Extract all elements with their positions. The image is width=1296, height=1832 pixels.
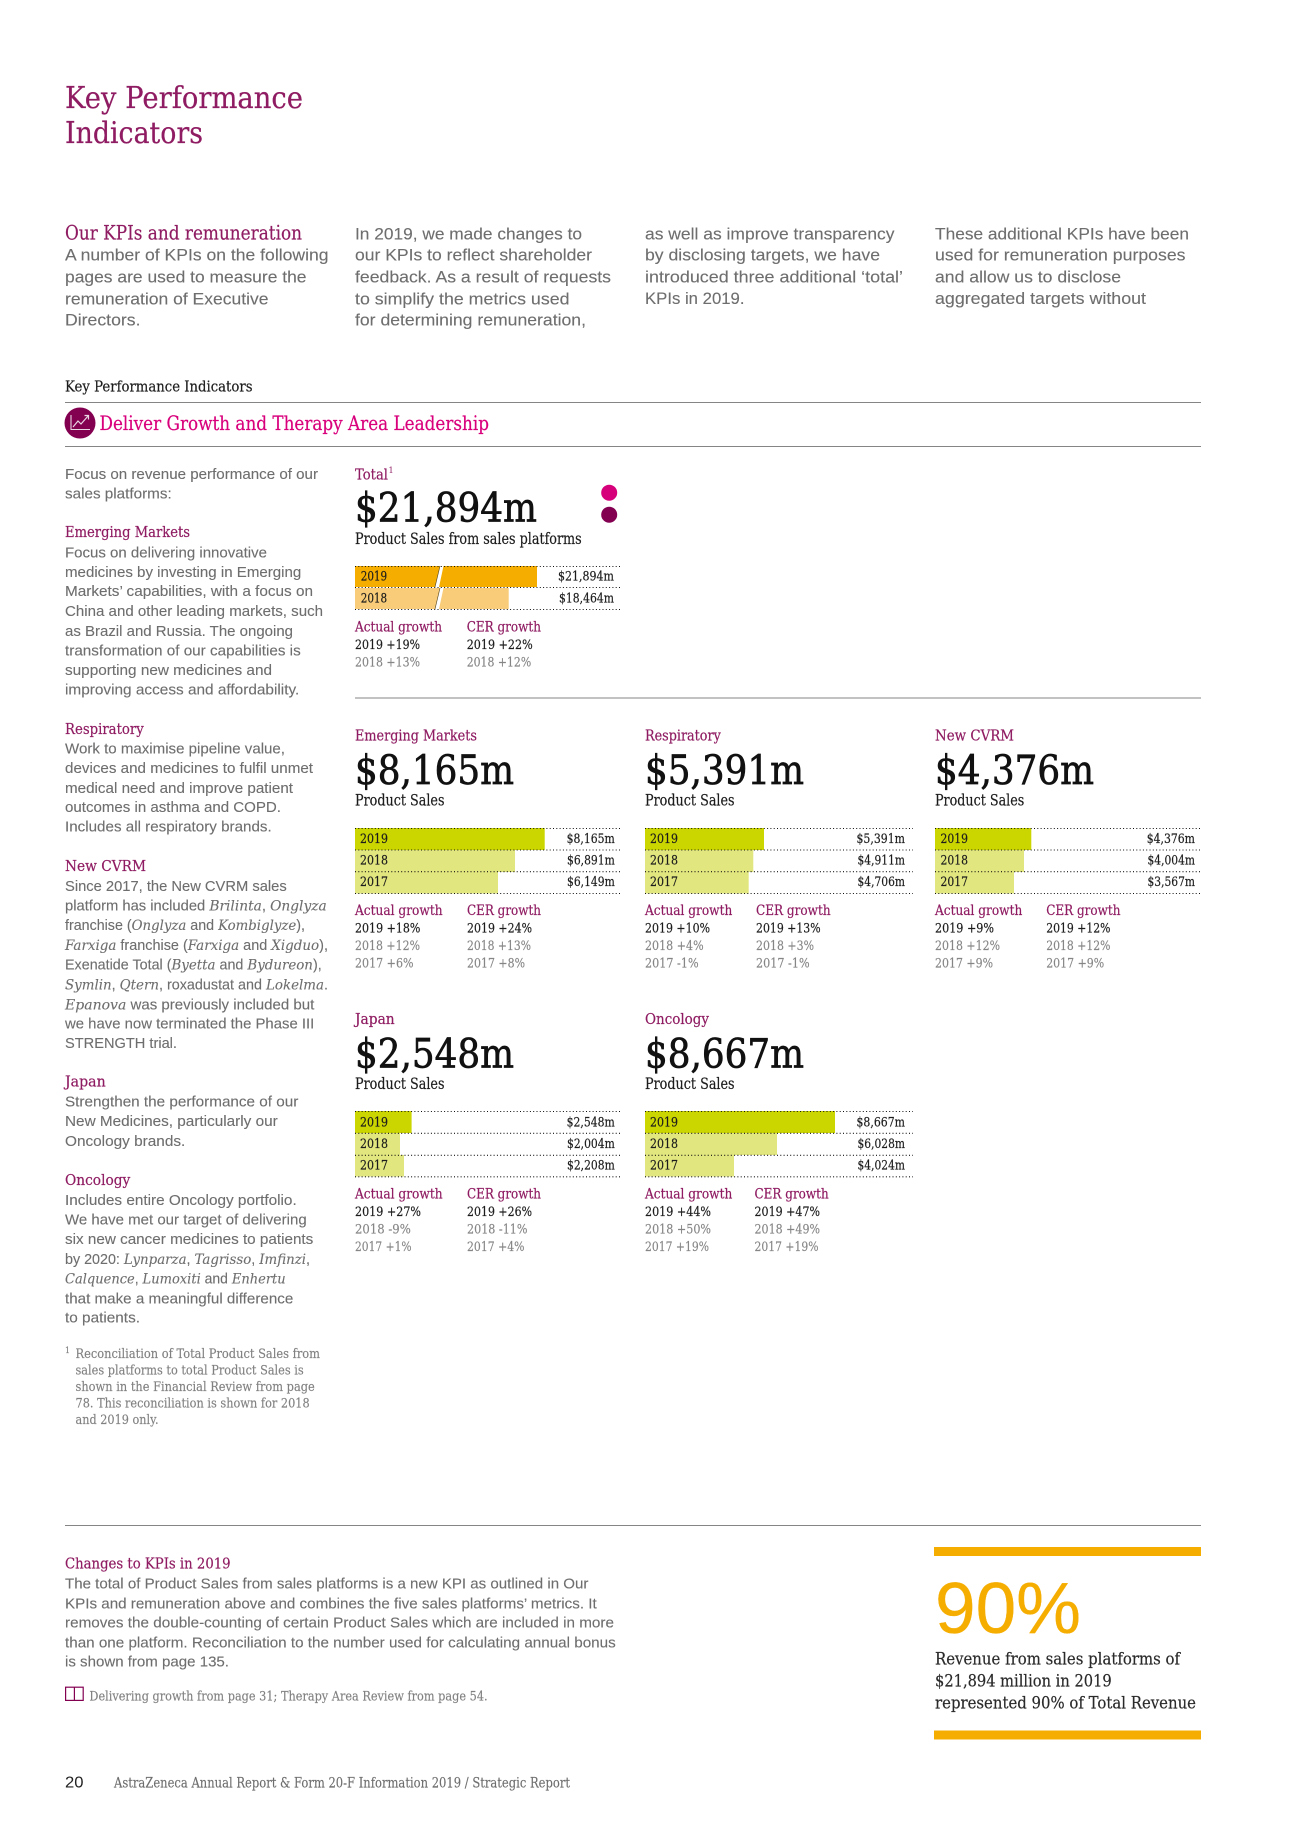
bar chart: $2,208m bbox=[567, 1159, 615, 1174]
bar chart: $4,024m bbox=[858, 1159, 905, 1174]
description: Japan: Japan bbox=[63, 1075, 106, 1091]
intro heading: Our KPIs and remuneration bbox=[65, 222, 302, 245]
bar chart: $8,165m bbox=[567, 832, 615, 847]
left intro bbox=[65, 466, 318, 502]
bar chart bbox=[355, 828, 622, 894]
growth figures: 2017 +6% bbox=[355, 956, 414, 971]
description: New CVRM: Exenatide Total (Byetta and Bydureon), bbox=[65, 956, 322, 973]
growth figures: 2018 +4% bbox=[645, 939, 704, 954]
headline value: $8,667m bbox=[645, 1031, 804, 1077]
growth figures: Actual growth bbox=[644, 903, 733, 919]
description: New CVRM: franchise (Onglyza and Kombiglyze), bbox=[65, 917, 305, 934]
description: Japan: Strengthen the performance of our bbox=[65, 1094, 298, 1111]
intro column 3: as well as improve transparency bbox=[645, 224, 895, 243]
growth figures: 2019 +12% bbox=[1046, 921, 1110, 936]
running title: AstraZeneca Annual Report & Form 20-F Information 2019 / Strategic Report bbox=[113, 1775, 570, 1791]
footnote: Reconciliation of Total Product Sales from bbox=[76, 1347, 320, 1362]
description: New CVRM: STRENGTH trial. bbox=[65, 1035, 177, 1052]
section heading: Deliver Growth and Therapy Area Leadership bbox=[100, 411, 489, 435]
intro text block bbox=[65, 222, 1189, 329]
description: Japan: Oncology brands. bbox=[65, 1133, 185, 1150]
intro column 1: A number of KPIs on the following bbox=[65, 245, 328, 264]
bar chart: $4,911m bbox=[858, 854, 905, 868]
growth figures bbox=[354, 903, 541, 971]
growth figures: 2018 +3% bbox=[756, 939, 814, 954]
description: Emerging Markets: Emerging Markets bbox=[65, 525, 190, 541]
KPI panel: Total bbox=[354, 466, 622, 671]
growth figures: 2017 +19% bbox=[645, 1240, 709, 1255]
growth figures: Actual growth bbox=[354, 903, 443, 919]
description: Oncology: that make a meaningful difference bbox=[65, 1290, 293, 1307]
intro column 4: and allow us to disclose bbox=[935, 267, 1121, 286]
growth figures: 2018 -9% bbox=[355, 1222, 411, 1237]
growth figures: 2018 +12% bbox=[467, 656, 531, 671]
description: Respiratory: medical need and improve patient bbox=[65, 780, 294, 797]
intro column 2: In 2019, we made changes to bbox=[355, 224, 582, 243]
bar chart: $4,376m bbox=[1147, 832, 1195, 847]
callout text: represented 90% of Total Revenue bbox=[935, 1693, 1196, 1712]
headline value: $4,376m bbox=[935, 748, 1094, 794]
description: Respiratory: Work to maximise pipeline value, bbox=[65, 740, 285, 757]
growth figures: 2019 +22% bbox=[467, 638, 533, 653]
callout figure: 90% bbox=[935, 1569, 1081, 1649]
bar chart bbox=[645, 1111, 913, 1177]
icon: book bbox=[66, 1687, 83, 1700]
description: Oncology bbox=[65, 1173, 313, 1327]
growth figures: CER growth bbox=[1046, 903, 1121, 919]
growth figures: 2019 +13% bbox=[756, 921, 821, 936]
growth figures: 2019 +24% bbox=[467, 921, 532, 936]
growth figures: 2018 -11% bbox=[467, 1222, 528, 1237]
title: Indicators bbox=[65, 116, 203, 151]
subtitle: Product Sales from sales platforms bbox=[355, 530, 582, 548]
description: Oncology: to patients. bbox=[65, 1310, 140, 1327]
growth figures: CER growth bbox=[756, 903, 831, 919]
bar chart: $5,391m bbox=[856, 832, 905, 847]
description: Respiratory: devices and medicines to fulfil unmet bbox=[65, 760, 314, 777]
description: New CVRM: Epanova was previously included but bbox=[64, 996, 315, 1013]
callout text: $21,894 million in 2019 bbox=[935, 1672, 1112, 1691]
growth figures: 2019 +9% bbox=[935, 921, 994, 936]
footnote: and 2019 only. bbox=[76, 1413, 159, 1428]
description: Emerging Markets: Markets’ capabilities, with a focus on bbox=[65, 583, 313, 600]
footnote: shown in the Financial Review from page bbox=[76, 1380, 315, 1395]
intro column 2: to simplify the metrics used bbox=[355, 289, 570, 308]
growth figures: 2019 +47% bbox=[754, 1205, 820, 1220]
growth figures: 2017 -1% bbox=[756, 956, 810, 971]
headline value: $21,894m bbox=[355, 486, 537, 532]
footnote: sales platforms to total Product Sales is bbox=[76, 1364, 304, 1378]
description: Oncology: six new cancer medicines to patients bbox=[65, 1231, 313, 1248]
intro column 3 bbox=[645, 224, 903, 308]
panel: changes to KPIs bbox=[65, 1554, 616, 1705]
growth figures: 2019 +10% bbox=[645, 921, 710, 936]
page number: 20 bbox=[65, 1774, 84, 1791]
left intro: Focus on revenue performance of our bbox=[65, 466, 318, 483]
bar chart: 2019 bbox=[940, 832, 968, 847]
intro column 2: feedback. As a result of requests bbox=[355, 267, 611, 286]
intro column 4: aggregated targets without bbox=[935, 289, 1146, 308]
growth figures: 2017 +4% bbox=[467, 1240, 524, 1255]
growth figures: 2018 +49% bbox=[754, 1222, 820, 1237]
growth figures: CER growth bbox=[467, 903, 541, 919]
intro column 1: pages are used to measure the bbox=[65, 267, 306, 286]
growth figures bbox=[644, 1187, 829, 1255]
growth figures: 2018 +50% bbox=[645, 1222, 711, 1237]
subtitle: Product Sales bbox=[355, 1075, 445, 1093]
growth figures: 2017 +9% bbox=[1046, 956, 1104, 971]
description: New CVRM: Farxiga franchise (Farxiga and Xigduo), bbox=[64, 937, 328, 954]
growth figures: CER growth bbox=[754, 1187, 829, 1203]
title: Key Performance bbox=[65, 81, 303, 116]
KPI panel: Respiratory bbox=[644, 729, 913, 971]
bar chart: $2,548m bbox=[567, 1115, 615, 1130]
bar chart: $18,464m bbox=[559, 591, 614, 606]
bar chart bbox=[935, 828, 1202, 894]
bar chart: 2017 bbox=[360, 875, 388, 890]
callout: 90% bbox=[934, 1547, 1201, 1740]
KPI panel: Oncology bbox=[644, 1012, 913, 1255]
changes body: The total of Product Sales from sales platforms is a new KPI as outlined in Our bbox=[65, 1575, 588, 1592]
bar chart: 2017 bbox=[650, 1159, 678, 1174]
bar chart: 2018 bbox=[650, 854, 678, 868]
description: New CVRM: Symlin, Qtern, roxadustat and Lokelma. bbox=[65, 976, 328, 993]
intro column 2 bbox=[355, 224, 611, 329]
headline value: $5,391m bbox=[645, 748, 804, 794]
description: New CVRM: platform has included Brilinta, Onglyza bbox=[65, 897, 327, 914]
changes body: than one platform. Reconciliation to the number used for calculating annual bonus bbox=[65, 1634, 616, 1651]
growth figures: 2017 +8% bbox=[467, 956, 525, 971]
panel label: Emerging Markets bbox=[355, 729, 477, 745]
growth figures bbox=[644, 903, 831, 971]
description: Oncology: Calquence, Lumoxiti and Enhertu bbox=[65, 1270, 286, 1287]
subtitle: Product Sales bbox=[935, 792, 1024, 810]
description: Respiratory: outcomes in asthma and COPD. bbox=[65, 799, 281, 816]
growth figures bbox=[354, 1187, 541, 1255]
growth figures: 2019 +27% bbox=[355, 1205, 421, 1220]
bar chart: 2017 bbox=[940, 875, 968, 890]
changes body: KPIs and remuneration above and combines the five sales platforms’ metrics. It bbox=[65, 1595, 598, 1612]
bar chart: 2018 bbox=[940, 854, 968, 868]
KPI panel: Emerging Markets bbox=[354, 729, 622, 971]
headline value: $8,165m bbox=[355, 748, 514, 794]
subtitle: Product Sales bbox=[355, 792, 445, 810]
bar chart: 2018 bbox=[360, 1137, 388, 1152]
growth figures: 2017 +9% bbox=[935, 956, 993, 971]
growth figures: 2018 +13% bbox=[467, 939, 531, 954]
bar chart: $6,028m bbox=[858, 1137, 905, 1152]
description: Oncology: Includes entire Oncology portfolio. bbox=[65, 1192, 297, 1209]
description: Emerging Markets: China and other leading markets, such bbox=[65, 603, 323, 620]
left column descriptions bbox=[63, 466, 328, 1428]
bar chart: $2,004m bbox=[567, 1137, 615, 1152]
section label: Key Performance Indicators bbox=[65, 378, 252, 396]
growth figures: 2018 +12% bbox=[355, 939, 420, 954]
description: Respiratory bbox=[65, 722, 314, 836]
callout text bbox=[935, 1649, 1196, 1712]
bar chart: $6,891m bbox=[567, 854, 615, 868]
footnote: 1 bbox=[65, 1346, 70, 1355]
bar chart: 2019 bbox=[360, 832, 388, 847]
intro column 1: Directors. bbox=[65, 310, 140, 329]
growth figures: 2019 +26% bbox=[467, 1205, 532, 1220]
panel label: Oncology bbox=[645, 1012, 710, 1028]
intro column 3: introduced three additional ‘total’ bbox=[645, 267, 903, 286]
intro column 4 bbox=[935, 224, 1189, 308]
growth figures: 2018 +12% bbox=[935, 939, 1000, 954]
growth figures bbox=[354, 620, 541, 671]
description: Emerging Markets bbox=[65, 525, 323, 698]
subtitle: Product Sales bbox=[645, 792, 735, 810]
intro column 3: KPIs in 2019. bbox=[645, 289, 744, 308]
bar chart: 2017 bbox=[360, 1159, 388, 1174]
intro column 4: used for remuneration purposes bbox=[935, 245, 1186, 264]
footer bbox=[65, 1774, 570, 1791]
changes body: is shown from page 135. bbox=[65, 1654, 229, 1671]
changes heading: Changes to KPIs in 2019 bbox=[65, 1554, 231, 1572]
description: New CVRM bbox=[64, 859, 328, 1052]
growth figures: 2017 +1% bbox=[355, 1240, 412, 1255]
growth figures: Actual growth bbox=[354, 620, 442, 636]
description: Emerging Markets: Focus on delivering innovative bbox=[65, 544, 267, 561]
growth figures: 2019 +19% bbox=[355, 638, 420, 653]
description: Emerging Markets: medicines by investing in Emerging bbox=[65, 564, 301, 581]
bar chart: 2017 bbox=[650, 875, 678, 890]
bar chart: 2019 bbox=[361, 569, 387, 584]
growth figures: 2017 -1% bbox=[645, 956, 699, 971]
bar chart: $3,567m bbox=[1148, 875, 1195, 890]
description: Emerging Markets: supporting new medicines and bbox=[65, 662, 272, 679]
bar chart: 2018 bbox=[361, 591, 387, 606]
intro column 3: by disclosing targets, we have bbox=[645, 245, 880, 264]
growth figures: Actual growth bbox=[644, 1187, 733, 1203]
growth figures: 2018 +12% bbox=[1046, 939, 1110, 954]
description: Emerging Markets: transformation of our capabilities is bbox=[65, 642, 301, 659]
subtitle: Product Sales bbox=[645, 1075, 735, 1093]
growth figures: 2019 +18% bbox=[355, 921, 420, 936]
panel label: Japan bbox=[353, 1012, 395, 1028]
footnote bbox=[65, 1346, 320, 1428]
description: Emerging Markets: as Brazil and Russia. The ongoing bbox=[65, 623, 293, 640]
description: New CVRM: we have now terminated the Phase III bbox=[64, 1015, 314, 1032]
panel label: Total bbox=[355, 467, 388, 483]
growth figures bbox=[934, 903, 1121, 971]
description: Oncology: by 2020: Lynparza, Tagrisso, Imfinzi, bbox=[65, 1251, 310, 1268]
description: Japan bbox=[63, 1075, 298, 1150]
changes body bbox=[65, 1575, 616, 1671]
bar chart: $4,004m bbox=[1148, 854, 1195, 868]
bar chart: $8,667m bbox=[856, 1115, 905, 1130]
bar chart bbox=[645, 828, 913, 894]
KPI panel: Japan bbox=[353, 1012, 622, 1255]
intro column 2: our KPIs to reflect shareholder bbox=[355, 245, 592, 264]
growth figures: CER growth bbox=[467, 620, 541, 636]
callout text: Revenue from sales platforms of bbox=[935, 1649, 1182, 1668]
changes body: removes the double-counting of certain Product Sales which are included in more bbox=[65, 1614, 614, 1631]
left intro: sales platforms: bbox=[65, 485, 172, 502]
cross reference: Delivering growth from page 31; Therapy Area Review from page 54. bbox=[89, 1690, 488, 1705]
growth figures: 2019 +44% bbox=[645, 1205, 711, 1220]
bar chart bbox=[355, 1111, 622, 1177]
description: Emerging Markets: improving access and affordability. bbox=[65, 681, 299, 698]
title bbox=[65, 81, 303, 151]
panel label: 1 bbox=[388, 466, 394, 475]
description: Respiratory: Respiratory bbox=[65, 722, 144, 738]
bar chart: $21,894m bbox=[558, 569, 614, 584]
description: Japan: New Medicines, particularly our bbox=[65, 1113, 278, 1130]
bar chart: 2019 bbox=[650, 832, 678, 847]
headline value: $2,548m bbox=[355, 1031, 514, 1077]
bar chart bbox=[355, 566, 622, 610]
bar chart: $6,149m bbox=[567, 875, 615, 890]
bar chart: 2019 bbox=[360, 1115, 388, 1130]
intro column 1 bbox=[65, 245, 328, 329]
panel label: New CVRM bbox=[935, 729, 1014, 745]
icon: growth chart bbox=[64, 408, 96, 438]
KPI panel: New CVRM bbox=[934, 729, 1202, 971]
description: Respiratory: Includes all respiratory brands. bbox=[65, 819, 272, 836]
bar chart: 2018 bbox=[360, 854, 388, 868]
growth figures: 2017 +19% bbox=[754, 1240, 818, 1255]
growth figures: Actual growth bbox=[354, 1187, 443, 1203]
intro column 4: These additional KPIs have been bbox=[935, 224, 1189, 243]
bar chart: 2018 bbox=[650, 1137, 678, 1152]
description: Oncology: We have met our target of delivering bbox=[65, 1211, 307, 1228]
intro column 1: remuneration of Executive bbox=[65, 289, 268, 308]
bar chart: $4,706m bbox=[858, 875, 905, 890]
intro column 2: for determining remuneration, bbox=[355, 310, 586, 329]
footnote: 78. This reconciliation is shown for 2018 bbox=[76, 1396, 310, 1411]
growth figures: 2018 +13% bbox=[355, 656, 420, 671]
growth figures: CER growth bbox=[467, 1187, 541, 1203]
description: Oncology: Oncology bbox=[65, 1173, 131, 1189]
panel label: Respiratory bbox=[645, 729, 722, 745]
legend dots bbox=[601, 485, 617, 523]
growth figures: Actual growth bbox=[934, 903, 1023, 919]
description: New CVRM: New CVRM bbox=[65, 859, 146, 875]
description: New CVRM: Since 2017, the New CVRM sales bbox=[65, 878, 287, 895]
bar chart: 2019 bbox=[650, 1115, 678, 1130]
